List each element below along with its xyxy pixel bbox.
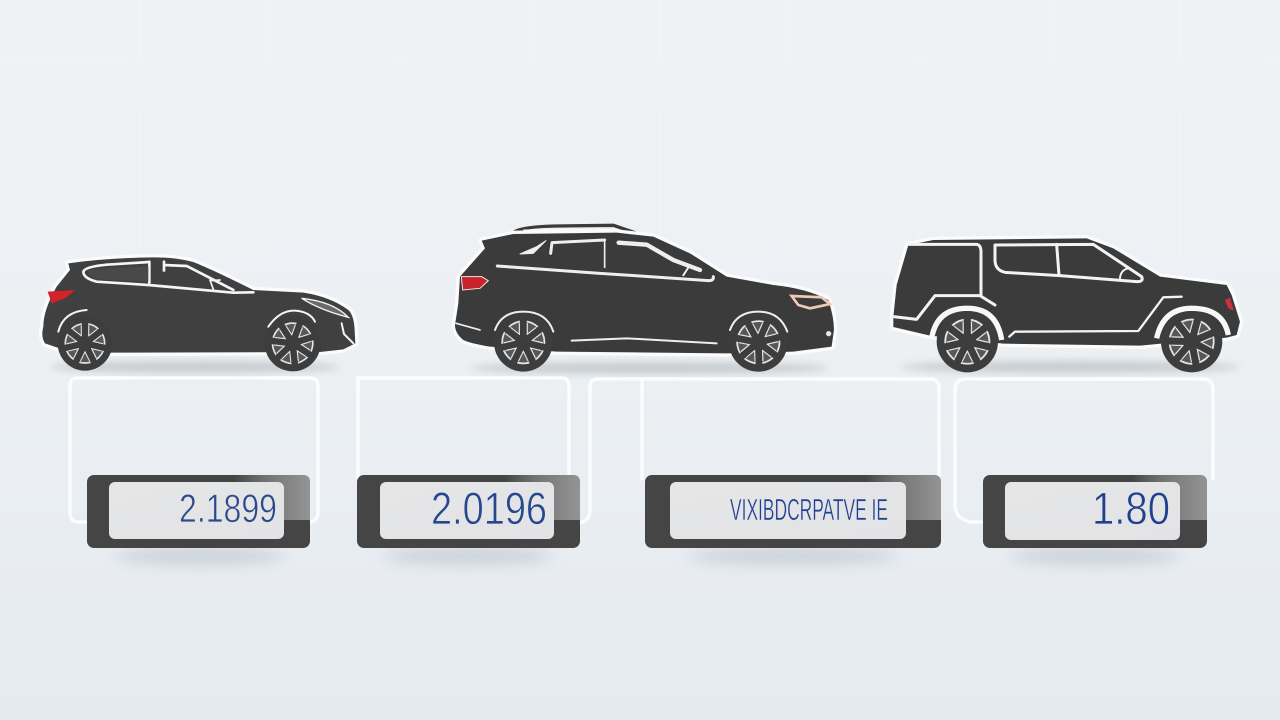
panel 2 outline: [358, 378, 569, 480]
display shadows: [115, 547, 1180, 565]
car: SUV: [893, 238, 1240, 379]
car: hatchback: [42, 257, 355, 379]
hatchback rear wheel: [58, 316, 112, 371]
value 3: VIXIBDCRPATVE IE: [730, 492, 888, 527]
display 2: [357, 475, 580, 548]
hatchback tail light: [48, 290, 75, 303]
crossover rear wheel: [494, 313, 553, 372]
SUV wheel arches: [932, 308, 1228, 340]
SUV window and trim lines: [893, 244, 1182, 337]
value 1: 2.1899: [179, 487, 277, 531]
SUV front wheel: [1154, 304, 1229, 379]
car shadows: [50, 361, 1240, 374]
crossover tail light: [461, 277, 488, 290]
display 1: [87, 475, 310, 548]
hatchback front wheel: [257, 307, 329, 379]
crossover roof rack: [513, 225, 635, 233]
display 3: [645, 475, 941, 548]
panel 3 outline: [576, 379, 939, 523]
hatchback windows: [58, 262, 353, 343]
crossover front wheel: [720, 304, 797, 381]
hatchback body: [42, 257, 355, 353]
panel 4 outline: [955, 379, 1213, 522]
SUV tail light: [1225, 298, 1234, 311]
value 2: 2.0196: [431, 483, 547, 534]
SUV rear wheel: [937, 311, 998, 372]
value 4: 1.80: [1092, 483, 1170, 534]
SUV body: [893, 238, 1240, 346]
car: crossover: [455, 225, 834, 381]
crossover body: [455, 233, 834, 353]
panel 1 outline: [70, 378, 318, 522]
crossover headlight: [792, 296, 830, 308]
display 4: [983, 475, 1207, 548]
crossover windows: [456, 240, 787, 343]
panel outlines: [70, 378, 1213, 523]
